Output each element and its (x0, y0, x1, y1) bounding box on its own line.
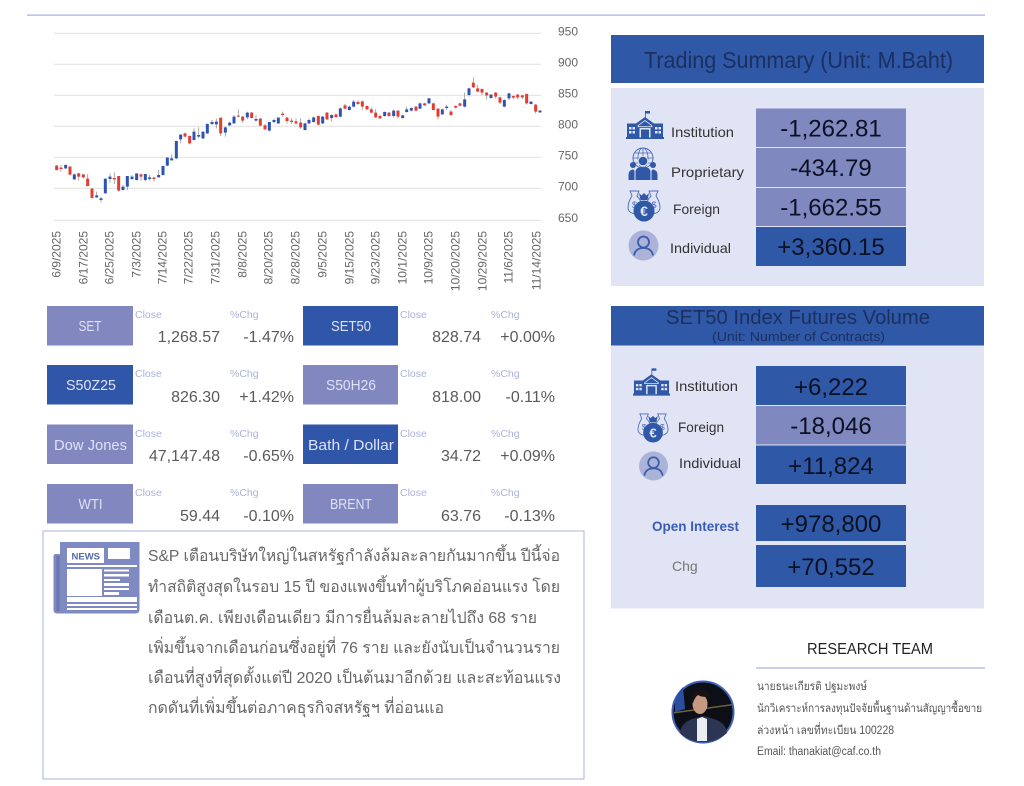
market tile: S50Z25 (47, 365, 294, 406)
market tile: WTI (47, 484, 294, 525)
market tile: SET50 (303, 306, 555, 346)
row: change: Chg (672, 558, 698, 574)
analyst details: นักวิเคราะห์การลงทุนปัจจัยพื้นฐานด้านสัญญาซื้อขาย (757, 700, 982, 715)
market tile: WTI: 59.44 (180, 508, 220, 525)
candlestick chart (50, 24, 578, 291)
x axis date labels: 8/28/2025 (288, 231, 302, 284)
row: institution: +6,222 (794, 374, 868, 401)
market tile: BRENT: BRENT (330, 496, 372, 513)
row: proprietary (628, 148, 906, 187)
research team (672, 641, 985, 758)
x axis date labels: 10/9/2025 (422, 231, 436, 284)
row: proprietary: Proprietary (671, 164, 744, 180)
x axis date labels: 7/31/2025 (208, 231, 222, 284)
news text: เดือนที่สูงที่สุดตั้งแต่ปี 2020 เป็นต้นมาอีกด้วย และสะท้อนแรง (148, 666, 561, 688)
row: proprietary: -434.79 (790, 155, 872, 182)
heading: futures volume (611, 306, 984, 346)
candles (57, 77, 540, 203)
row: institution: Institution (671, 124, 734, 140)
market tile: WTI: WTI (78, 496, 102, 513)
row: individual (628, 227, 906, 266)
market tile: WTI: -0.10% (243, 508, 294, 525)
row: institution: Institution (675, 378, 738, 394)
row: foreign: Foreign (673, 201, 720, 217)
market tile: BRENT: -0.13% (504, 508, 555, 525)
row: change (672, 545, 906, 587)
market tile: SET50: Close (400, 309, 427, 321)
market tile: Bath / Dollar: Bath / Dollar (308, 437, 394, 454)
market tile: Dow Jones: -0.65% (243, 448, 294, 465)
row: individual: +11,824 (788, 453, 874, 480)
market tile: S50Z25: Close (135, 368, 162, 380)
market tile: BRENT (303, 484, 555, 525)
market tile: S50H26: Close (400, 368, 427, 380)
market tile: Dow Jones: Dow Jones (54, 437, 127, 454)
news text: ทำสถิติสูงสุดในรอบ 15 ปี ของแพงขึ้นทำผู้บริโภคอ่อนแรง โดย (148, 575, 560, 597)
y axis labels: 800 (558, 118, 578, 132)
market tile: SET50: %Chg (491, 309, 520, 321)
x axis date labels: 8/8/2025 (236, 231, 250, 278)
market tile: SET: %Chg (230, 309, 259, 321)
market tile: S50Z25: %Chg (230, 368, 259, 380)
row: institution (633, 366, 906, 405)
row: individual: Individual (679, 455, 741, 471)
row: open interest (652, 505, 906, 541)
market tile: WTI: Close (135, 487, 162, 499)
market tile: Dow Jones: Close (135, 428, 162, 440)
row: open interest: +978,800 (781, 511, 881, 538)
x axis date labels: 6/9/2025 (50, 231, 64, 278)
row: foreign (638, 406, 906, 444)
market tile: S50H26: S50H26 (326, 377, 376, 394)
icon: newspaper (54, 542, 140, 614)
news text: เดือนต.ค. เพียงเดือนเดียว มีการยื่นล้มละลายไปถึง 68 ราย (148, 606, 537, 627)
market tile: BRENT: Close (400, 487, 427, 499)
market tile: Dow Jones: 47,147.48 (149, 448, 220, 465)
news text: S&P เตือนบริษัทใหญ่ในสหรัฐกำลังล้มละลายกันมากขึ้น ปีนี้จ่อ (148, 544, 560, 565)
heading: futures volume: SET50 Index Futures Volume (666, 307, 930, 329)
heading: research team: RESEARCH TEAM (807, 641, 933, 658)
market tile: SET50: SET50 (331, 318, 371, 335)
row: individual: Individual (670, 240, 731, 256)
panel: trading summary (611, 35, 984, 286)
y axis labels (558, 24, 578, 225)
y axis labels: 950 (558, 24, 578, 38)
row: individual (639, 446, 906, 484)
market tile: BRENT: %Chg (491, 487, 520, 499)
row: foreign (628, 188, 906, 226)
market tile: Bath / Dollar: +0.09% (500, 448, 555, 465)
x axis date labels (50, 231, 544, 291)
heading: futures volume: (Unit: Number of Contracts) (712, 330, 885, 344)
x axis date labels: 7/3/2025 (130, 231, 144, 278)
market tile: Dow Jones: %Chg (230, 428, 259, 440)
x axis date labels: 10/29/2025 (476, 231, 490, 291)
market tile: S50H26 (303, 365, 555, 406)
heading: trading summary (611, 35, 984, 83)
market tile: SET50: 828.74 (432, 329, 481, 346)
row: change: +70,552 (787, 554, 875, 581)
market tile: SET50: +0.00% (500, 329, 555, 346)
y axis labels: 700 (558, 180, 578, 194)
market tile: Bath / Dollar: %Chg (491, 428, 520, 440)
market tile: Bath / Dollar: Close (400, 428, 427, 440)
news text: กดดันที่เพิ่มขึ้นต่อภาคธุรกิจสหรัฐฯ ที่อ่อนแอ (148, 696, 444, 718)
market tile: S50H26: %Chg (491, 368, 520, 380)
x axis date labels: 9/5/2025 (316, 231, 330, 278)
market tile: SET (47, 306, 294, 346)
market tile: S50Z25: 826.30 (171, 389, 220, 406)
market tile: SET: -1.47% (243, 329, 294, 346)
heading: trading summary: Trading Summary (Unit: M.Baht) (644, 47, 953, 73)
market tile: S50H26: -0.11% (505, 389, 555, 406)
analyst details: นายธนะเกียรติ ปฐมะพงษ์ (757, 679, 867, 693)
news text: เพิ่มขึ้นจากเดือนก่อนซึ่งอยู่ที่ 76 ราย และยังนับเป็นจำนวนราย (148, 636, 560, 658)
market tile: Bath / Dollar (303, 424, 555, 465)
x axis date labels: 9/15/2025 (342, 231, 356, 284)
row: individual: +3,360.15 (777, 234, 885, 261)
x axis date labels: 9/23/2025 (368, 231, 382, 284)
x axis date labels: 11/6/2025 (502, 231, 516, 284)
row: institution (626, 108, 906, 147)
x axis date labels: 8/20/2025 (262, 231, 276, 284)
market tile: SET: Close (135, 309, 162, 321)
panel: news (43, 531, 584, 779)
row: foreign: Foreign (678, 419, 724, 435)
market tile: SET: 1,268.57 (158, 329, 220, 346)
news text (148, 544, 561, 718)
x axis date labels: 7/22/2025 (182, 231, 196, 284)
row: institution: -1,262.81 (780, 116, 882, 142)
market tile: Dow Jones (47, 424, 294, 465)
x axis date labels: 6/25/2025 (102, 231, 116, 284)
panel: SET50 index futures volume (611, 306, 984, 608)
analyst details: ล่วงหน้า เลขที่ทะเบียน 100228 (757, 722, 894, 737)
market tile: BRENT: 63.76 (441, 508, 481, 525)
analyst details: Email: thanakiat@caf.co.th (757, 746, 881, 758)
y axis labels: 850 (558, 86, 578, 100)
market tile: S50Z25: +1.42% (239, 389, 294, 406)
x axis date labels: 10/20/2025 (448, 231, 462, 291)
row: foreign: -18,046 (790, 413, 872, 440)
market tile: S50Z25: S50Z25 (66, 377, 116, 394)
row: open interest: Open Interest (652, 519, 740, 534)
x axis date labels: 11/14/2025 (530, 231, 544, 290)
market tile: WTI: %Chg (230, 487, 259, 499)
portrait (672, 682, 734, 742)
x axis date labels: 10/1/2025 (396, 231, 410, 284)
row: foreign: -1,662.55 (780, 194, 882, 222)
x axis date labels: 7/14/2025 (156, 231, 170, 284)
y axis labels: 750 (558, 148, 578, 162)
y axis labels: 900 (558, 56, 578, 70)
icon: newspaper: NEWS (72, 552, 100, 562)
y axis labels: 650 (558, 211, 578, 225)
market tile: S50H26: 818.00 (432, 389, 481, 406)
market tile: Bath / Dollar: 34.72 (441, 448, 481, 465)
market tile: SET: SET (78, 318, 102, 335)
analyst details (757, 679, 982, 758)
x axis date labels: 6/17/2025 (76, 231, 90, 284)
